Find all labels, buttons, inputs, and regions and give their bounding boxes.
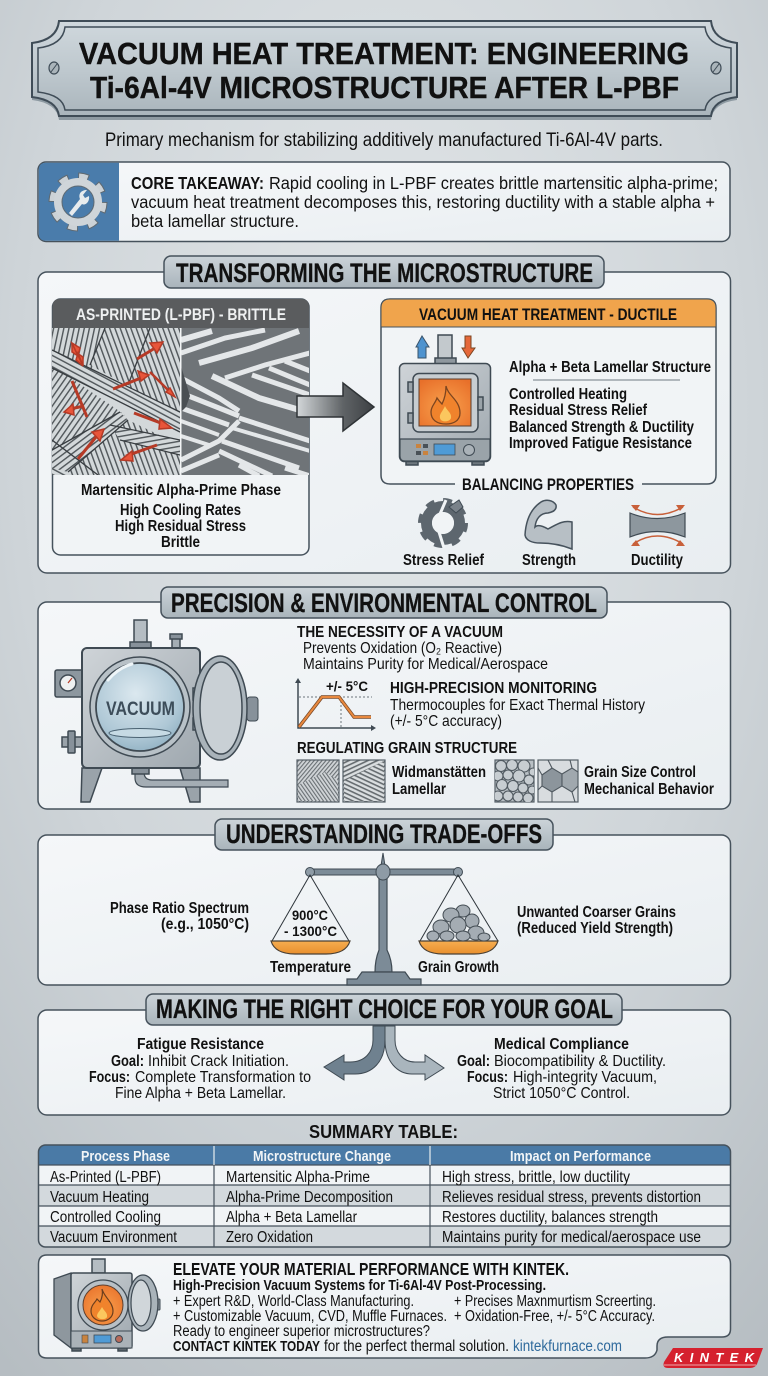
property labels: Stress Relief: [403, 552, 485, 569]
call to action text: for the perfect thermal solution.: [324, 1338, 509, 1355]
temperature range: - 1300°C: [284, 923, 337, 939]
as-printed text: Martensitic Alpha-Prime Phase: [81, 482, 281, 499]
grain labels: size and behavior: Grain Size Control: [584, 764, 696, 781]
core takeaway text: [131, 173, 718, 231]
vacuum treatment text: Improved Fatigue Resistance: [509, 435, 692, 452]
table row: controlled cooling: Controlled Cooling: [50, 1209, 161, 1226]
screw right: [711, 62, 721, 74]
table header: [81, 1148, 651, 1165]
core takeaway text: CORE TAKEAWAY:: [131, 173, 264, 193]
scale labels: Temperature: [270, 959, 351, 976]
note: phase ratio: Phase Ratio Spectrum: [110, 900, 249, 917]
vacuum treatment text: [509, 359, 711, 452]
micrograph: widmanstatten: [297, 760, 339, 802]
note: coarser grains: (Reduced Yield Strength): [517, 920, 673, 937]
micrograph: coarse grains: [538, 760, 578, 802]
as-printed header: AS-PRINTED (L-PBF) - BRITTLE: [76, 305, 286, 324]
panel: transforming the microstructure: [38, 256, 730, 573]
table row: vacuum environment: [50, 1229, 701, 1246]
chart: thermal profile: [295, 678, 376, 731]
title plaque: [32, 21, 737, 120]
logo: kintek: KINTEK: [674, 1350, 756, 1365]
panel: precision and environmental control: [38, 587, 730, 809]
vacuum treatment header: VACUUM HEAT TREATMENT - DUCTILE: [419, 306, 677, 324]
icon: strength arm: [525, 500, 572, 549]
fatigue resistance text: Focus:: [89, 1069, 130, 1086]
arrow: right branch: [385, 1026, 444, 1080]
table row: controlled cooling: [50, 1209, 658, 1226]
necessity of a vacuum text: THE NECESSITY OF A VACUUM: [297, 624, 503, 641]
grain labels: size and behavior: Mechanical Behavior: [584, 781, 714, 798]
vacuum treatment text: Balanced Strength & Ductility: [509, 419, 694, 436]
temperature range: [284, 907, 337, 939]
regulating grain structure heading: REGULATING GRAIN STRUCTURE: [297, 740, 517, 757]
necessity of a vacuum text: [297, 624, 548, 673]
medical compliance text: Goal:: [457, 1053, 490, 1070]
fatigue resistance text: Fine Alpha + Beta Lamellar.: [115, 1085, 286, 1102]
note: phase ratio: [110, 900, 249, 933]
panel: making the right choice: [38, 994, 730, 1115]
divider seam: [180, 328, 182, 475]
icon: orange air arrow down: [462, 336, 475, 358]
heading: trade-offs: UNDERSTANDING TRADE-OFFS: [226, 819, 542, 849]
panel: core takeaway: [38, 162, 730, 242]
scale labels: [270, 959, 499, 976]
vacuum treatment text: Controlled Heating: [509, 386, 627, 403]
table row: as-printed: Martensitic Alpha-Prime: [226, 1169, 370, 1186]
medical compliance text: Medical Compliance: [494, 1036, 629, 1053]
as-printed text: [81, 482, 281, 551]
call to action text: [173, 1259, 656, 1355]
call to action text: + Precises Maxnmurtism Screerting.: [454, 1293, 656, 1310]
vacuum treatment text: Alpha + Beta Lamellar Structure: [509, 359, 711, 376]
property labels: Strength: [522, 552, 576, 569]
temperature range: 900°C: [292, 907, 328, 923]
icon: balance scale: [271, 853, 498, 985]
arrow: transformation: [297, 383, 374, 431]
table row: as-printed: [50, 1169, 630, 1186]
chart: thermal profile: +/- 5°C: [326, 678, 368, 694]
title text: VACUUM HEAT TREATMENT: ENGINEERING: [79, 36, 689, 71]
icon: furnace: [400, 335, 490, 465]
table row: vacuum environment: Vacuum Environment: [50, 1229, 178, 1246]
heading: precision: PRECISION & ENVIRONMENTAL CONTROL: [171, 588, 597, 618]
title text: Ti-6Al-4V MICROSTRUCTURE AFTER L-PBF: [90, 70, 679, 105]
fatigue resistance text: [89, 1036, 311, 1102]
table header: Microstructure Change: [253, 1148, 391, 1165]
icon: ductility: [630, 505, 685, 546]
high-precision monitoring text: [390, 680, 645, 730]
core takeaway text: beta lamellar structure.: [131, 211, 299, 231]
scale labels: Grain Growth: [418, 959, 499, 976]
screw left: [49, 62, 59, 74]
panel: call to action: [38, 1255, 730, 1358]
high-precision monitoring text: (+/- 5°C accuracy): [390, 713, 502, 730]
note: coarser grains: [517, 904, 676, 937]
fatigue resistance text: Goal:: [111, 1053, 144, 1070]
medical compliance text: High-integrity Vacuum,: [513, 1069, 657, 1086]
property labels: [403, 552, 683, 569]
subtitle: Primary mechanism for stabilizing additively manufactured Ti-6Al-4V parts.: [105, 129, 663, 151]
vacuum treatment header: [381, 299, 716, 327]
table row: vacuum heating: [50, 1189, 701, 1206]
medical compliance text: Focus:: [467, 1069, 508, 1086]
summary table: [38, 1145, 730, 1247]
vacuum treatment text: Residual Stress Relief: [509, 402, 648, 419]
table row: vacuum environment: Zero Oxidation: [226, 1229, 313, 1246]
table row: as-printed: High stress, brittle, low ductility: [442, 1169, 630, 1186]
fatigue resistance text: Inhibit Crack Initiation.: [148, 1053, 289, 1070]
necessity of a vacuum text: Prevents Oxidation (O₂ Reactive): [303, 640, 502, 657]
table row: vacuum heating: Relieves residual stress, prevents distortion: [442, 1189, 701, 1206]
card: as-printed: [52, 299, 310, 555]
icon: vacuum chamber: [55, 620, 258, 802]
note: coarser grains: Unwanted Coarser Grains: [517, 904, 676, 921]
as-printed text: High Cooling Rates: [120, 502, 241, 519]
right pan: [419, 941, 498, 954]
table row: vacuum heating: Alpha-Prime Decomposition: [226, 1189, 393, 1206]
arrow: left branch: [324, 1026, 385, 1080]
vacuum label: VACUUM: [106, 699, 175, 720]
icon: gear and wrench: [39, 163, 119, 241]
logo: kintek: [664, 1348, 763, 1368]
call to action text: + Customizable Vacuum, CVD, Muffle Furnaces.: [173, 1308, 447, 1325]
grain labels: widmanstatten and lamellar: [392, 764, 486, 798]
heading: right choice: MAKING THE RIGHT CHOICE FOR YOUR GOAL: [156, 994, 613, 1024]
call to action text: kintekfurnace.com: [513, 1338, 622, 1355]
medical compliance text: Biocompatibility & Ductility.: [494, 1053, 666, 1070]
core takeaway text: Rapid cooling in L-PBF creates brittle martensitic alpha-prime;: [269, 173, 718, 193]
summary table heading: SUMMARY TABLE:: [309, 1121, 458, 1142]
table row: controlled cooling: Alpha + Beta Lamellar: [226, 1209, 357, 1226]
balancing properties heading: BALANCING PROPERTIES: [462, 476, 634, 494]
note: phase ratio: (e.g., 1050°C): [161, 916, 249, 933]
icon: furnace with open door: [54, 1259, 160, 1351]
fatigue resistance text: Complete Transformation to: [135, 1069, 311, 1086]
call to action text: + Expert R&D, World-Class Manufacturing.: [173, 1293, 414, 1310]
core takeaway text: vacuum heat treatment decomposes this, restoring ductility with a stable alpha +: [131, 192, 715, 212]
micrograph: lamellar: [343, 760, 385, 802]
panel: understanding trade-offs: [38, 819, 730, 985]
as-printed header: [52, 299, 309, 328]
necessity of a vacuum text: Maintains Purity for Medical/Aerospace: [303, 656, 548, 673]
icon: stress relief gear: [422, 500, 464, 548]
call to action text: ELEVATE YOUR MATERIAL PERFORMANCE WITH KINTEK.: [173, 1259, 569, 1279]
grain labels: widmanstatten and lamellar: Widmanstätten: [392, 764, 486, 781]
high-precision monitoring text: Thermocouples for Exact Thermal History: [390, 697, 645, 714]
micrograph: fine grains: [493, 760, 537, 803]
microstructure: martensitic needles: [52, 328, 180, 475]
fatigue resistance text: Fatigue Resistance: [137, 1036, 264, 1053]
grain labels: size and behavior: [584, 764, 714, 798]
medical compliance text: [457, 1036, 666, 1102]
microstructure: lamellar bands: [181, 328, 310, 476]
table row: vacuum heating: Vacuum Heating: [50, 1189, 149, 1206]
stress arrows: [64, 342, 175, 461]
call to action text: Ready to engineer superior microstructures?: [173, 1323, 430, 1340]
high-precision monitoring text: HIGH-PRECISION MONITORING: [390, 680, 597, 697]
heading: transforming: TRANSFORMING THE MICROSTRUCTURE: [176, 258, 593, 288]
table header: Impact on Performance: [510, 1148, 651, 1165]
grain labels: widmanstatten and lamellar: Lamellar: [392, 781, 446, 798]
left pan: [271, 941, 350, 954]
table row: as-printed: As-Printed (L-PBF): [50, 1169, 161, 1186]
medical compliance text: Strict 1050°C Control.: [493, 1085, 630, 1102]
property labels: Ductility: [631, 552, 683, 569]
card: vacuum heat treatment: [381, 299, 716, 484]
grain stones: [427, 905, 490, 941]
icon: blue air arrow up: [416, 336, 429, 358]
table row: controlled cooling: Restores ductility, balances strength: [442, 1209, 658, 1226]
as-printed text: High Residual Stress: [115, 518, 246, 535]
title text: [79, 36, 689, 105]
table header: Process Phase: [81, 1148, 170, 1165]
call to action text: High-Precision Vacuum Systems for Ti-6Al-4V Post-Processing.: [173, 1277, 546, 1294]
table row: vacuum environment: Maintains purity for medical/aerospace use: [442, 1229, 701, 1246]
call to action text: CONTACT KINTEK TODAY: [173, 1338, 320, 1355]
call to action text: + Oxidation-Free, +/- 5°C Accuracy.: [454, 1308, 655, 1325]
as-printed text: Brittle: [161, 534, 200, 551]
